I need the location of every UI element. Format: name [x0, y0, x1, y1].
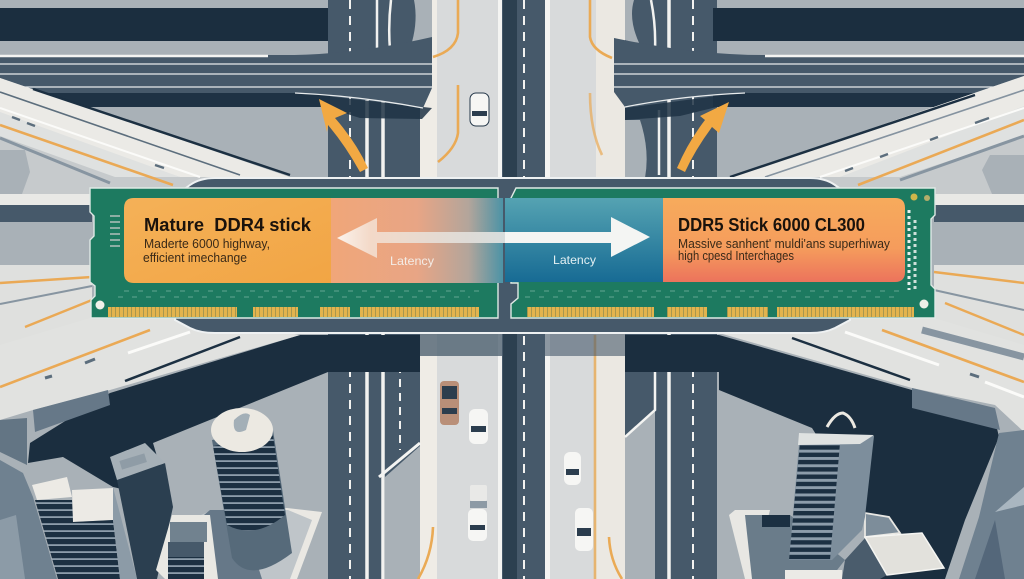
white roofs: [32, 477, 72, 500]
latency label: Latency: [390, 254, 434, 268]
gold contact pins: [527, 307, 914, 317]
vertical highways: [328, 0, 717, 579]
latency arrow: [337, 218, 505, 258]
white car: [469, 409, 488, 444]
chip pads: [908, 210, 910, 290]
title: DDR5 Stick 6000 CL300: [678, 214, 865, 235]
DDR5 memory stick: [505, 188, 935, 318]
pcb traces: [118, 291, 480, 297]
label card: [505, 198, 905, 282]
lower right diagonal ramp: [719, 318, 1024, 432]
description line two: high cpesd Interchages: [678, 248, 794, 263]
right overpass: [614, 38, 1024, 120]
annex roof: [865, 533, 944, 575]
label card: [124, 198, 505, 283]
upper right diagonal ramp: [730, 76, 1024, 195]
rock building: [0, 460, 57, 579]
left tower platform: [170, 508, 322, 579]
car top centre: [470, 93, 489, 126]
orange lane lines on the service roads: [418, 0, 622, 579]
platform: [729, 510, 770, 579]
upper left diagonal ramp: [0, 78, 290, 195]
description line two: efficient imechange: [143, 250, 247, 265]
lower road wedges: [385, 446, 420, 579]
central bridge behind memory sticks: [175, 178, 850, 333]
lower dark shadows: [28, 335, 999, 579]
gold contact pins: [108, 307, 479, 317]
annex back: [865, 513, 900, 537]
roof handle: [827, 413, 855, 428]
tower body: [789, 433, 874, 560]
white car: [470, 485, 487, 508]
left overpass: [0, 37, 432, 119]
left low buildings: [0, 443, 218, 579]
cylinder tower: [211, 408, 292, 570]
white car: [575, 508, 593, 551]
orange arrow upper left: [319, 99, 368, 172]
white car: [564, 452, 581, 485]
latency label: Latency: [553, 253, 596, 267]
title: Mature DDR4 stick: [144, 214, 312, 235]
right edge rock building: [959, 430, 1024, 579]
chip pads: [110, 216, 120, 246]
striped block: [35, 500, 120, 579]
small tower front: [156, 515, 218, 579]
lower cars: [440, 381, 593, 551]
rooftop with vent: [110, 443, 165, 480]
description: Maderte 6000 highway,: [144, 236, 270, 251]
right tower group: [729, 413, 944, 579]
mounting holes: [910, 194, 930, 308]
lower left diagonal ramp: [0, 318, 300, 465]
stick board: [90, 188, 498, 318]
annex shadow: [842, 537, 887, 579]
pcb traces: [525, 291, 905, 297]
side ramps right of the stick: [934, 194, 1024, 390]
description: Massive sanhent' muldi'ans superhiway: [678, 236, 890, 251]
stick board: [511, 188, 935, 318]
upper dark band left: [0, 8, 328, 41]
bridge shadow on the lower roads: [420, 334, 625, 356]
grey roof: [27, 457, 72, 485]
DDR4 memory stick: [90, 188, 505, 318]
dark block: [117, 463, 173, 579]
brown car: [440, 381, 459, 425]
orange arrow upper right: [677, 102, 729, 172]
latency arrow: [505, 217, 650, 257]
side ramps left of the stick: [0, 194, 92, 390]
mounting hole: [96, 300, 104, 310]
upper dark band right: [713, 8, 1024, 41]
white car: [468, 509, 487, 541]
